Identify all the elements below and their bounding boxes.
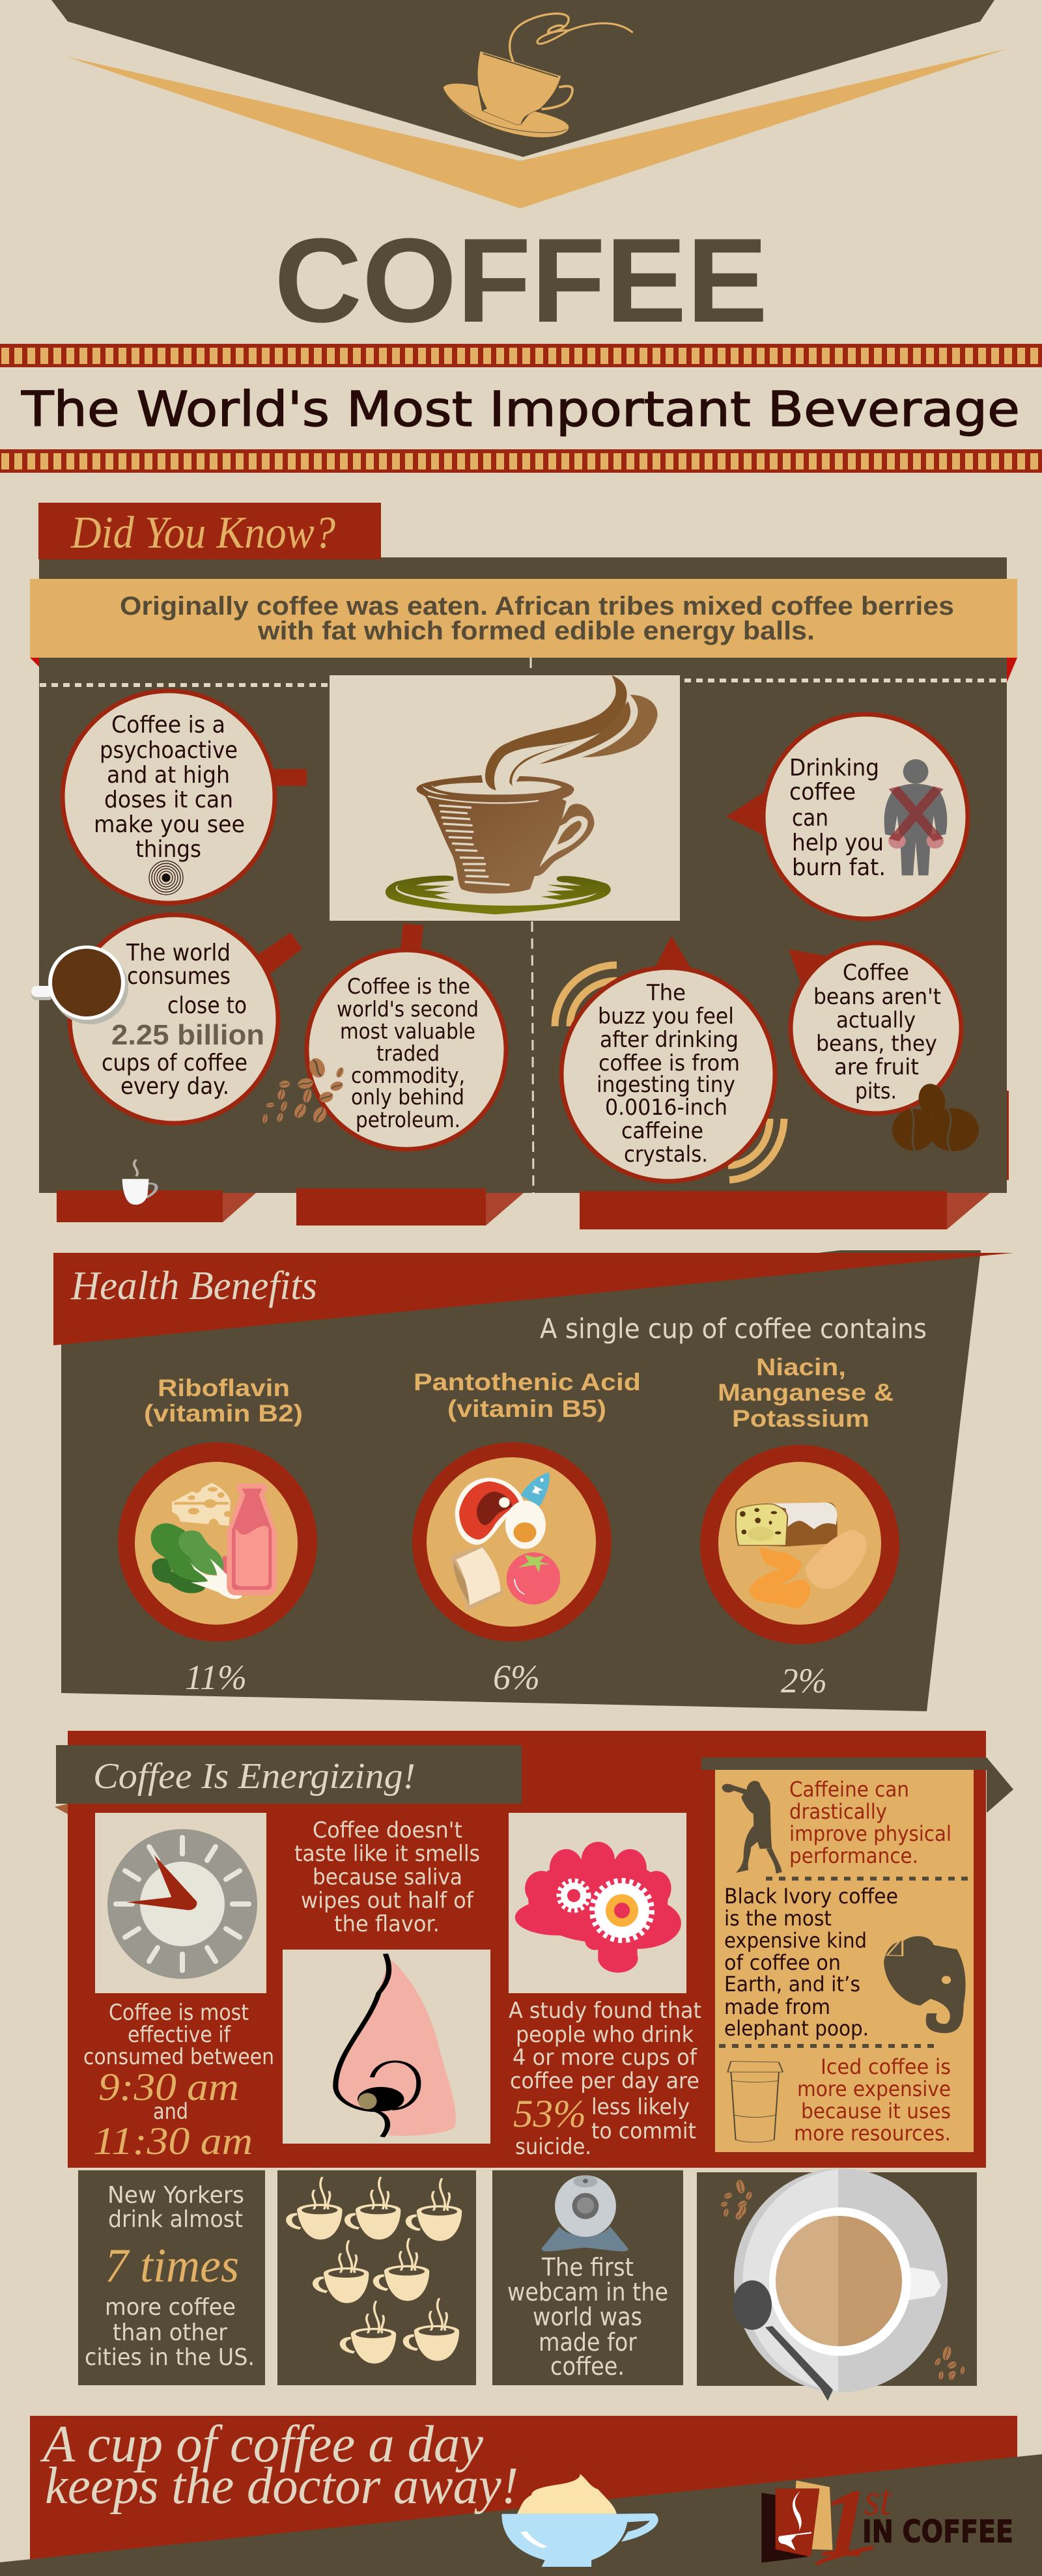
icon: hypnotic spiral bbox=[149, 861, 183, 895]
text: coffee smell fact bbox=[294, 1817, 480, 1937]
callout: fruit pits bubble: are fruit bbox=[834, 1054, 919, 1080]
callout: fruit pits bubble bbox=[789, 943, 979, 1151]
heading tab: Coffee Is Energizing! bbox=[93, 1756, 415, 1797]
text: study on suicide: 53% bbox=[513, 2092, 586, 2135]
text: study on suicide: suicide. bbox=[515, 2134, 591, 2160]
panel: new yorkers: more coffee bbox=[105, 2294, 236, 2321]
callout: traded commodity bubble: traded bbox=[376, 1041, 440, 1066]
text: physical performance: improve physical bbox=[789, 1821, 951, 1846]
header banner bbox=[51, 0, 1007, 208]
gold fact banner bbox=[30, 579, 1017, 658]
panel: first webcam: world was bbox=[533, 2303, 642, 2331]
panel: coffee is energizing bbox=[55, 1731, 1013, 2168]
icon: small beans bbox=[720, 2179, 965, 2381]
data: 2 percent: 2% bbox=[781, 1661, 827, 1700]
title: COFFEE bbox=[274, 213, 768, 347]
callout: psychoactive bubble: and at high bbox=[107, 762, 230, 789]
callout: caffeine crystals bubble: ingesting tiny bbox=[597, 1072, 735, 1098]
callout: caffeine crystals bubble: 0.0016-inch bbox=[605, 1095, 727, 1121]
text: coffee smell fact: wipes out half of bbox=[301, 1888, 474, 1914]
icon: clock bbox=[107, 1829, 257, 1979]
data: 6 percent: 6% bbox=[493, 1658, 540, 1697]
text: coffee is most effective: 9:30 am bbox=[98, 2065, 239, 2108]
text: physical performance: Caffeine can bbox=[789, 1777, 909, 1802]
label: niacin manganese potassium bbox=[718, 1354, 894, 1432]
callout: burn fat bubble: coffee bbox=[789, 779, 856, 805]
label: riboflavin: (vitamin B2) bbox=[144, 1400, 303, 1427]
closing slogan bbox=[40, 2416, 518, 2515]
text: study on suicide: coffee per day are bbox=[510, 2068, 699, 2094]
dark panel background bbox=[39, 557, 1007, 1193]
bottom striped band bbox=[0, 449, 1042, 473]
panel: first webcam bbox=[492, 2170, 683, 2385]
clock card bbox=[95, 1813, 266, 1993]
subheading: A single cup of coffee contains bbox=[540, 1313, 927, 1345]
dark panel background bbox=[61, 1250, 981, 1711]
callout: 2.25 billion bubble: consumes bbox=[127, 963, 231, 990]
callout: psychoactive bubble: psychoactive bbox=[100, 737, 238, 764]
text: black ivory coffee: elephant poop. bbox=[724, 2016, 869, 2041]
callout: fruit pits bubble: beans, they bbox=[816, 1031, 937, 1057]
callout: caffeine crystals bubble bbox=[561, 936, 775, 1181]
callout: psychoactive bubble: make you see bbox=[94, 811, 245, 838]
icon: center coffee cup picture bbox=[330, 675, 680, 921]
label: pantothenic acid: Pantothenic Acid bbox=[414, 1369, 641, 1395]
logo: 1st in coffee: IN COFFEE bbox=[862, 2514, 1013, 2550]
text: coffee smell fact: the flavor. bbox=[334, 1911, 440, 1937]
gold fact banner: Originally coffee was eaten. African tribes mixed coffee berries bbox=[120, 592, 954, 621]
text: iced coffee: more resources. bbox=[794, 2121, 951, 2146]
text: iced coffee: because it uses bbox=[801, 2099, 951, 2123]
nose card bbox=[283, 1950, 490, 2144]
text: black ivory coffee: of coffee on bbox=[724, 1950, 841, 1975]
text: coffee is most effective: consumed between bbox=[83, 2044, 274, 2070]
label: niacin manganese potassium: Niacin, bbox=[756, 1354, 846, 1380]
panel: new yorkers bbox=[78, 2170, 265, 2385]
panel: new yorkers: than other bbox=[113, 2319, 227, 2346]
text: black ivory coffee: is the most bbox=[724, 1906, 832, 1931]
text: physical performance: performance. bbox=[789, 1843, 918, 1868]
callout: 2.25 billion bubble bbox=[31, 915, 302, 1123]
text: study on suicide: 4 or more cups of bbox=[513, 2045, 697, 2071]
fold accent bbox=[55, 1804, 68, 1814]
data: 11 percent: 11% bbox=[185, 1658, 247, 1697]
text: coffee is most effective: Coffee is most bbox=[109, 2000, 249, 2026]
red corner accents bbox=[30, 658, 1017, 1180]
logo: 1st in coffee bbox=[761, 2469, 1013, 2576]
icon: top view coffee cup bbox=[31, 945, 128, 1024]
icon: large coffee beans bbox=[892, 1081, 979, 1151]
icon: gold vibration arcs bbox=[555, 965, 784, 1180]
top striped band bbox=[0, 344, 1042, 367]
callout: 2.25 billion bubble: 2.25 billion bbox=[111, 1019, 264, 1051]
label: riboflavin bbox=[144, 1375, 303, 1427]
callout: psychoactive bubble: Coffee is a bbox=[111, 712, 225, 738]
icon: boxer silhouette bbox=[722, 1781, 782, 1873]
panel: new yorkers: 7 times bbox=[105, 2239, 239, 2293]
text: iced coffee: Iced coffee is bbox=[821, 2054, 951, 2079]
text: iced coffee bbox=[794, 2054, 951, 2146]
icon: cup on saucer bbox=[733, 2168, 948, 2401]
callout: caffeine crystals bubble: crystals. bbox=[624, 1141, 708, 1168]
callout: burn fat bubble bbox=[726, 714, 968, 919]
callout: burn fat bubble: can bbox=[792, 805, 828, 832]
gold fact banner: with fat which formed edible energy balls. bbox=[257, 617, 815, 645]
text: study on suicide: less likely bbox=[591, 2094, 690, 2120]
arrow: dark side tab bbox=[701, 1757, 1013, 1813]
callout: caffeine crystals bubble: The bbox=[646, 980, 686, 1006]
text: physical performance bbox=[789, 1777, 951, 1868]
panel: cup and saucer from above bbox=[697, 2168, 977, 2401]
text: black ivory coffee: Earth, and it’s bbox=[724, 1972, 860, 1996]
callout: 2.25 billion bubble: The world bbox=[126, 940, 231, 966]
closing slogan: keeps the doctor away! bbox=[45, 2457, 518, 2515]
heading ribbon bbox=[53, 1253, 1013, 1345]
panel: health benefits bbox=[53, 1250, 1013, 1711]
icon: riboflavin foods bbox=[118, 1442, 317, 1642]
panel: new yorkers: New Yorkers bbox=[107, 2182, 244, 2209]
text: iced coffee: more expensive bbox=[797, 2077, 951, 2101]
icon: nose bbox=[335, 1953, 456, 2137]
text: study on suicide: people who drink bbox=[516, 2022, 694, 2048]
dark diagonal ground bbox=[0, 2454, 1042, 2576]
icon: pantothenic acid foods bbox=[412, 1442, 612, 1642]
text: coffee is most effective: and bbox=[153, 2099, 188, 2125]
text: black ivory coffee bbox=[724, 1884, 898, 2041]
text: black ivory coffee: made from bbox=[724, 1995, 830, 2019]
callout: 2.25 billion bubble: close to bbox=[167, 992, 247, 1019]
icon: small white cup bbox=[122, 1160, 156, 1205]
text: black ivory coffee: expensive kind bbox=[724, 1928, 867, 1953]
logo: 1st in coffee: st bbox=[864, 2475, 892, 2525]
text: coffee is most effective: effective if bbox=[128, 2022, 231, 2048]
callout: caffeine crystals bubble: coffee is from bbox=[598, 1050, 740, 1076]
callout: psychoactive bubble: things bbox=[135, 836, 201, 863]
gold facts column bbox=[715, 1770, 974, 2152]
icon: elephant bbox=[884, 1936, 966, 2033]
text: coffee smell fact: Coffee doesn't bbox=[313, 1817, 462, 1843]
callout: burn fat bubble: help you bbox=[792, 830, 884, 856]
callout: caffeine crystals bubble: after drinking bbox=[600, 1027, 739, 1053]
callout: psychoactive bubble bbox=[63, 691, 307, 903]
callout: traded commodity bubble: most valuable bbox=[340, 1018, 475, 1044]
icon: steaming cup on saucer bbox=[444, 14, 633, 137]
callout: traded commodity bubble: commodity, bbox=[351, 1063, 465, 1088]
callout: traded commodity bubble: petroleum. bbox=[356, 1107, 460, 1132]
callout: burn fat bubble: Drinking bbox=[789, 755, 879, 781]
callout: traded commodity bubble: world's second bbox=[337, 996, 479, 1022]
text: study on suicide: A study found that bbox=[509, 1998, 701, 2024]
callout: traded commodity bubble bbox=[262, 923, 506, 1149]
heading tab: Did You Know? bbox=[70, 508, 335, 558]
text: coffee is most effective bbox=[83, 2000, 274, 2163]
callout: fruit pits bubble: beans aren't bbox=[813, 984, 941, 1010]
callout: traded commodity bubble: Coffee is the bbox=[347, 973, 470, 999]
text: physical performance: drastically bbox=[789, 1799, 887, 1824]
brain card bbox=[509, 1813, 686, 1993]
label: niacin manganese potassium: Potassium bbox=[732, 1405, 869, 1432]
heading ribbon: Health Benefits bbox=[70, 1264, 317, 1308]
panel: first webcam: webcam in the bbox=[507, 2278, 668, 2306]
panel: first webcam: made for bbox=[539, 2328, 637, 2357]
heading tab bbox=[56, 1745, 522, 1804]
panel: new yorkers: cities in the US. bbox=[85, 2344, 255, 2371]
dark top shape bbox=[51, 0, 994, 157]
panel: first webcam: The first bbox=[541, 2253, 634, 2282]
label: pantothenic acid: (vitamin B5) bbox=[447, 1395, 606, 1422]
callout: burn fat bubble: burn fat. bbox=[792, 854, 886, 881]
icon: brain with gears bbox=[515, 1842, 681, 1972]
red footer block bbox=[30, 2416, 1017, 2572]
icon: niacin manganese potassium foods bbox=[700, 1445, 899, 1644]
logo: 1st in coffee: 1 bbox=[819, 2469, 871, 2576]
callout: fruit pits bubble: pits. bbox=[855, 1078, 897, 1104]
callout: fruit pits bubble: Coffee bbox=[843, 960, 909, 986]
label: riboflavin: Riboflavin bbox=[158, 1375, 290, 1401]
callout: caffeine crystals bubble: buzz you feel bbox=[598, 1003, 734, 1029]
callout: 2.25 billion bubble: every day. bbox=[120, 1073, 229, 1100]
icon: crossed out person bbox=[884, 759, 947, 875]
panel: new yorkers: drink almost bbox=[108, 2206, 243, 2233]
subtitle: The World's Most Important Beverage bbox=[21, 382, 1020, 438]
icon: webcam bbox=[542, 2176, 628, 2251]
text: coffee smell fact: taste like it smells bbox=[294, 1841, 480, 1867]
callout: traded commodity bubble: only behind bbox=[351, 1084, 464, 1110]
label: pantothenic acid bbox=[414, 1369, 641, 1422]
footer banner bbox=[0, 2416, 1042, 2576]
label: niacin manganese potassium: Manganese & bbox=[718, 1379, 894, 1406]
icon: scattered coffee beans bbox=[262, 1056, 345, 1125]
icon: takeaway cup bbox=[727, 2062, 783, 2142]
red panel background bbox=[68, 1731, 986, 2168]
panel: first webcam: coffee. bbox=[550, 2352, 625, 2381]
callout: caffeine crystals bubble: caffeine bbox=[621, 1118, 703, 1144]
icon: blue cup with cream bbox=[501, 2474, 658, 2567]
text: coffee smell fact: because saliva bbox=[313, 1864, 462, 1890]
text: coffee is most effective: 11:30 am bbox=[93, 2120, 253, 2163]
callout: fruit pits bubble: actually bbox=[836, 1007, 916, 1033]
text: black ivory coffee: Black Ivory coffee bbox=[724, 1884, 898, 1909]
gold chevron bbox=[66, 49, 1007, 208]
text: study on suicide bbox=[509, 1998, 701, 2160]
text: study on suicide: to commit bbox=[591, 2118, 696, 2144]
red 3d base blocks bbox=[57, 1188, 990, 1229]
closing slogan: A cup of coffee a day bbox=[40, 2416, 483, 2473]
callout: psychoactive bubble: doses it can bbox=[104, 787, 233, 813]
panel: seven mugs bbox=[277, 2170, 476, 2385]
callout: 2.25 billion bubble: cups of coffee bbox=[102, 1050, 247, 1076]
